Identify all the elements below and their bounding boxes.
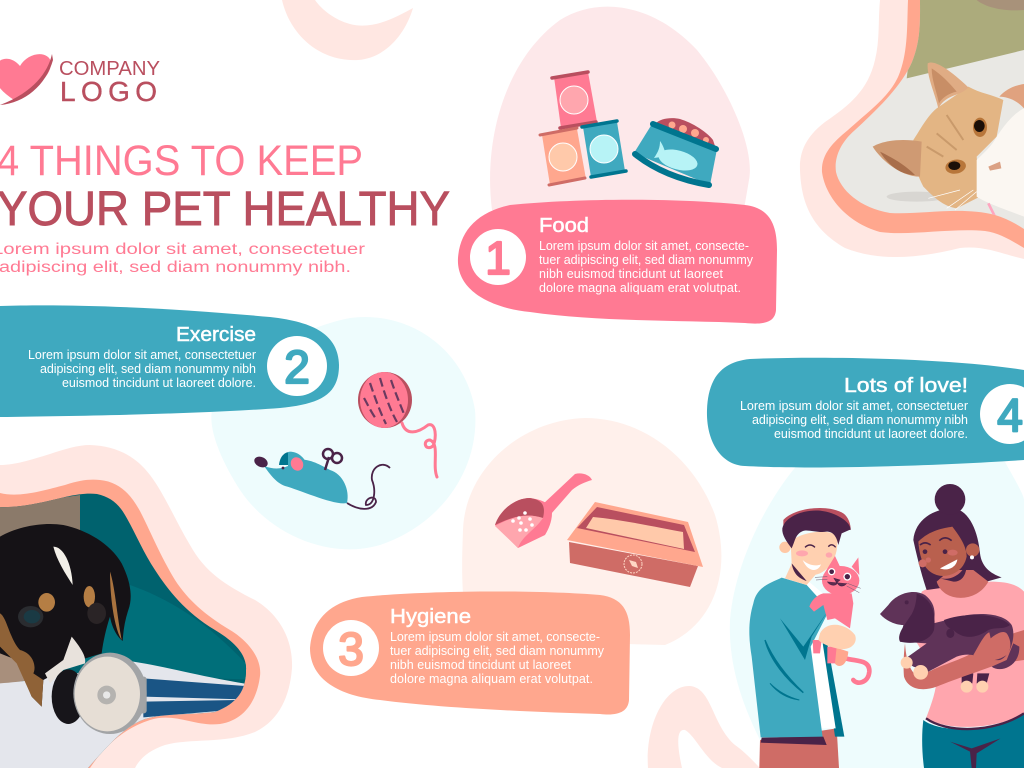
text: exercise [28,348,256,390]
panel: exercise blob [211,317,475,549]
badge: 1 [470,229,526,285]
icon: litter scoop [495,473,592,548]
text: love: euismod tincidunt ut laoreet dolore. [774,427,968,441]
decorative arch top [282,0,413,60]
subtitle: adipiscing elit, sed diam nonummy nibh. [0,259,351,276]
illustration: man with cat [749,508,869,768]
icon: pink can [552,72,597,128]
text: food [539,239,754,295]
photo: cat [800,0,1024,259]
heading: food: Food [539,215,589,237]
illustration: woman with dog [880,484,1024,768]
decorative arch bottom [648,686,760,768]
card: exercise [0,305,339,417]
icon: cans and food bowl [540,72,717,185]
subtitle [0,241,365,276]
text: hygiene: dolore magna aliquam erat volutpat. [390,672,593,686]
photo: puppy [0,445,292,768]
title: YOUR PET HEALTHY [0,183,450,236]
text: food: nibh euismod tincidunt ut laoreet [539,267,724,281]
icon: toy mouse [253,449,390,509]
text: love [740,399,968,441]
text: hygiene: tuer adipiscing elit, sed diam nonummy [390,644,605,658]
logo [0,54,160,107]
badge: 3: 3 [338,623,364,675]
text: hygiene: nibh euismod tincidunt ut laoreet [390,658,572,672]
icon: litter box [567,502,703,587]
panel: hygiene blob [462,418,721,645]
badge: 3 [323,620,379,676]
heading: exercise: Exercise [176,324,256,346]
badge: 1: 1 [485,232,511,284]
illustration: pink cat [809,556,869,683]
badge: 4 [980,384,1024,444]
text: food: Lorem ipsum dolor sit amet, consecte- [539,239,749,253]
icon: teal can [582,121,626,177]
card: love [707,358,1024,467]
text: exercise: Lorem ipsum dolor sit amet, consectetuer [28,348,256,362]
text: love: adipiscing elit, sed diam nonummy nibh [752,413,968,427]
illustration: dog [880,592,1024,693]
text: exercise: adipiscing elit, sed diam nonummy nibh [40,362,256,376]
icon: yarn ball [358,372,437,477]
company text: COMPANY [59,58,160,80]
logo text: LOGO [60,76,157,107]
badge: 2: 2 [284,341,310,393]
text: hygiene: Lorem ipsum dolor sit amet, consecte- [390,630,600,644]
card: hygiene [310,591,630,714]
title: 4 THINGS TO KEEP [0,137,363,185]
title [0,137,450,236]
icon: heart [0,54,53,105]
text: hygiene [390,630,605,686]
text: love: Lorem ipsum dolor sit amet, consectetuer [740,399,968,413]
panel: people blob [730,462,1024,768]
text: food: dolore magna aliquam erat volutpat. [539,281,741,295]
badge: 2 [267,336,327,396]
text: exercise: euismod tincidunt ut laoreet dolore. [62,376,256,390]
icon: bowl [634,118,717,185]
subtitle: Lorem ipsum dolor sit amet, consectetuer [0,241,365,258]
card: food [458,200,777,324]
heading: love: Lots of love! [844,375,968,397]
icon: salmon can [540,128,586,185]
text: food: tuer adipiscing elit, sed diam nonummy [539,253,754,267]
badge: 4: 4 [997,389,1023,441]
heading: hygiene: Hygiene [390,606,471,628]
panel: food blob [490,7,750,215]
